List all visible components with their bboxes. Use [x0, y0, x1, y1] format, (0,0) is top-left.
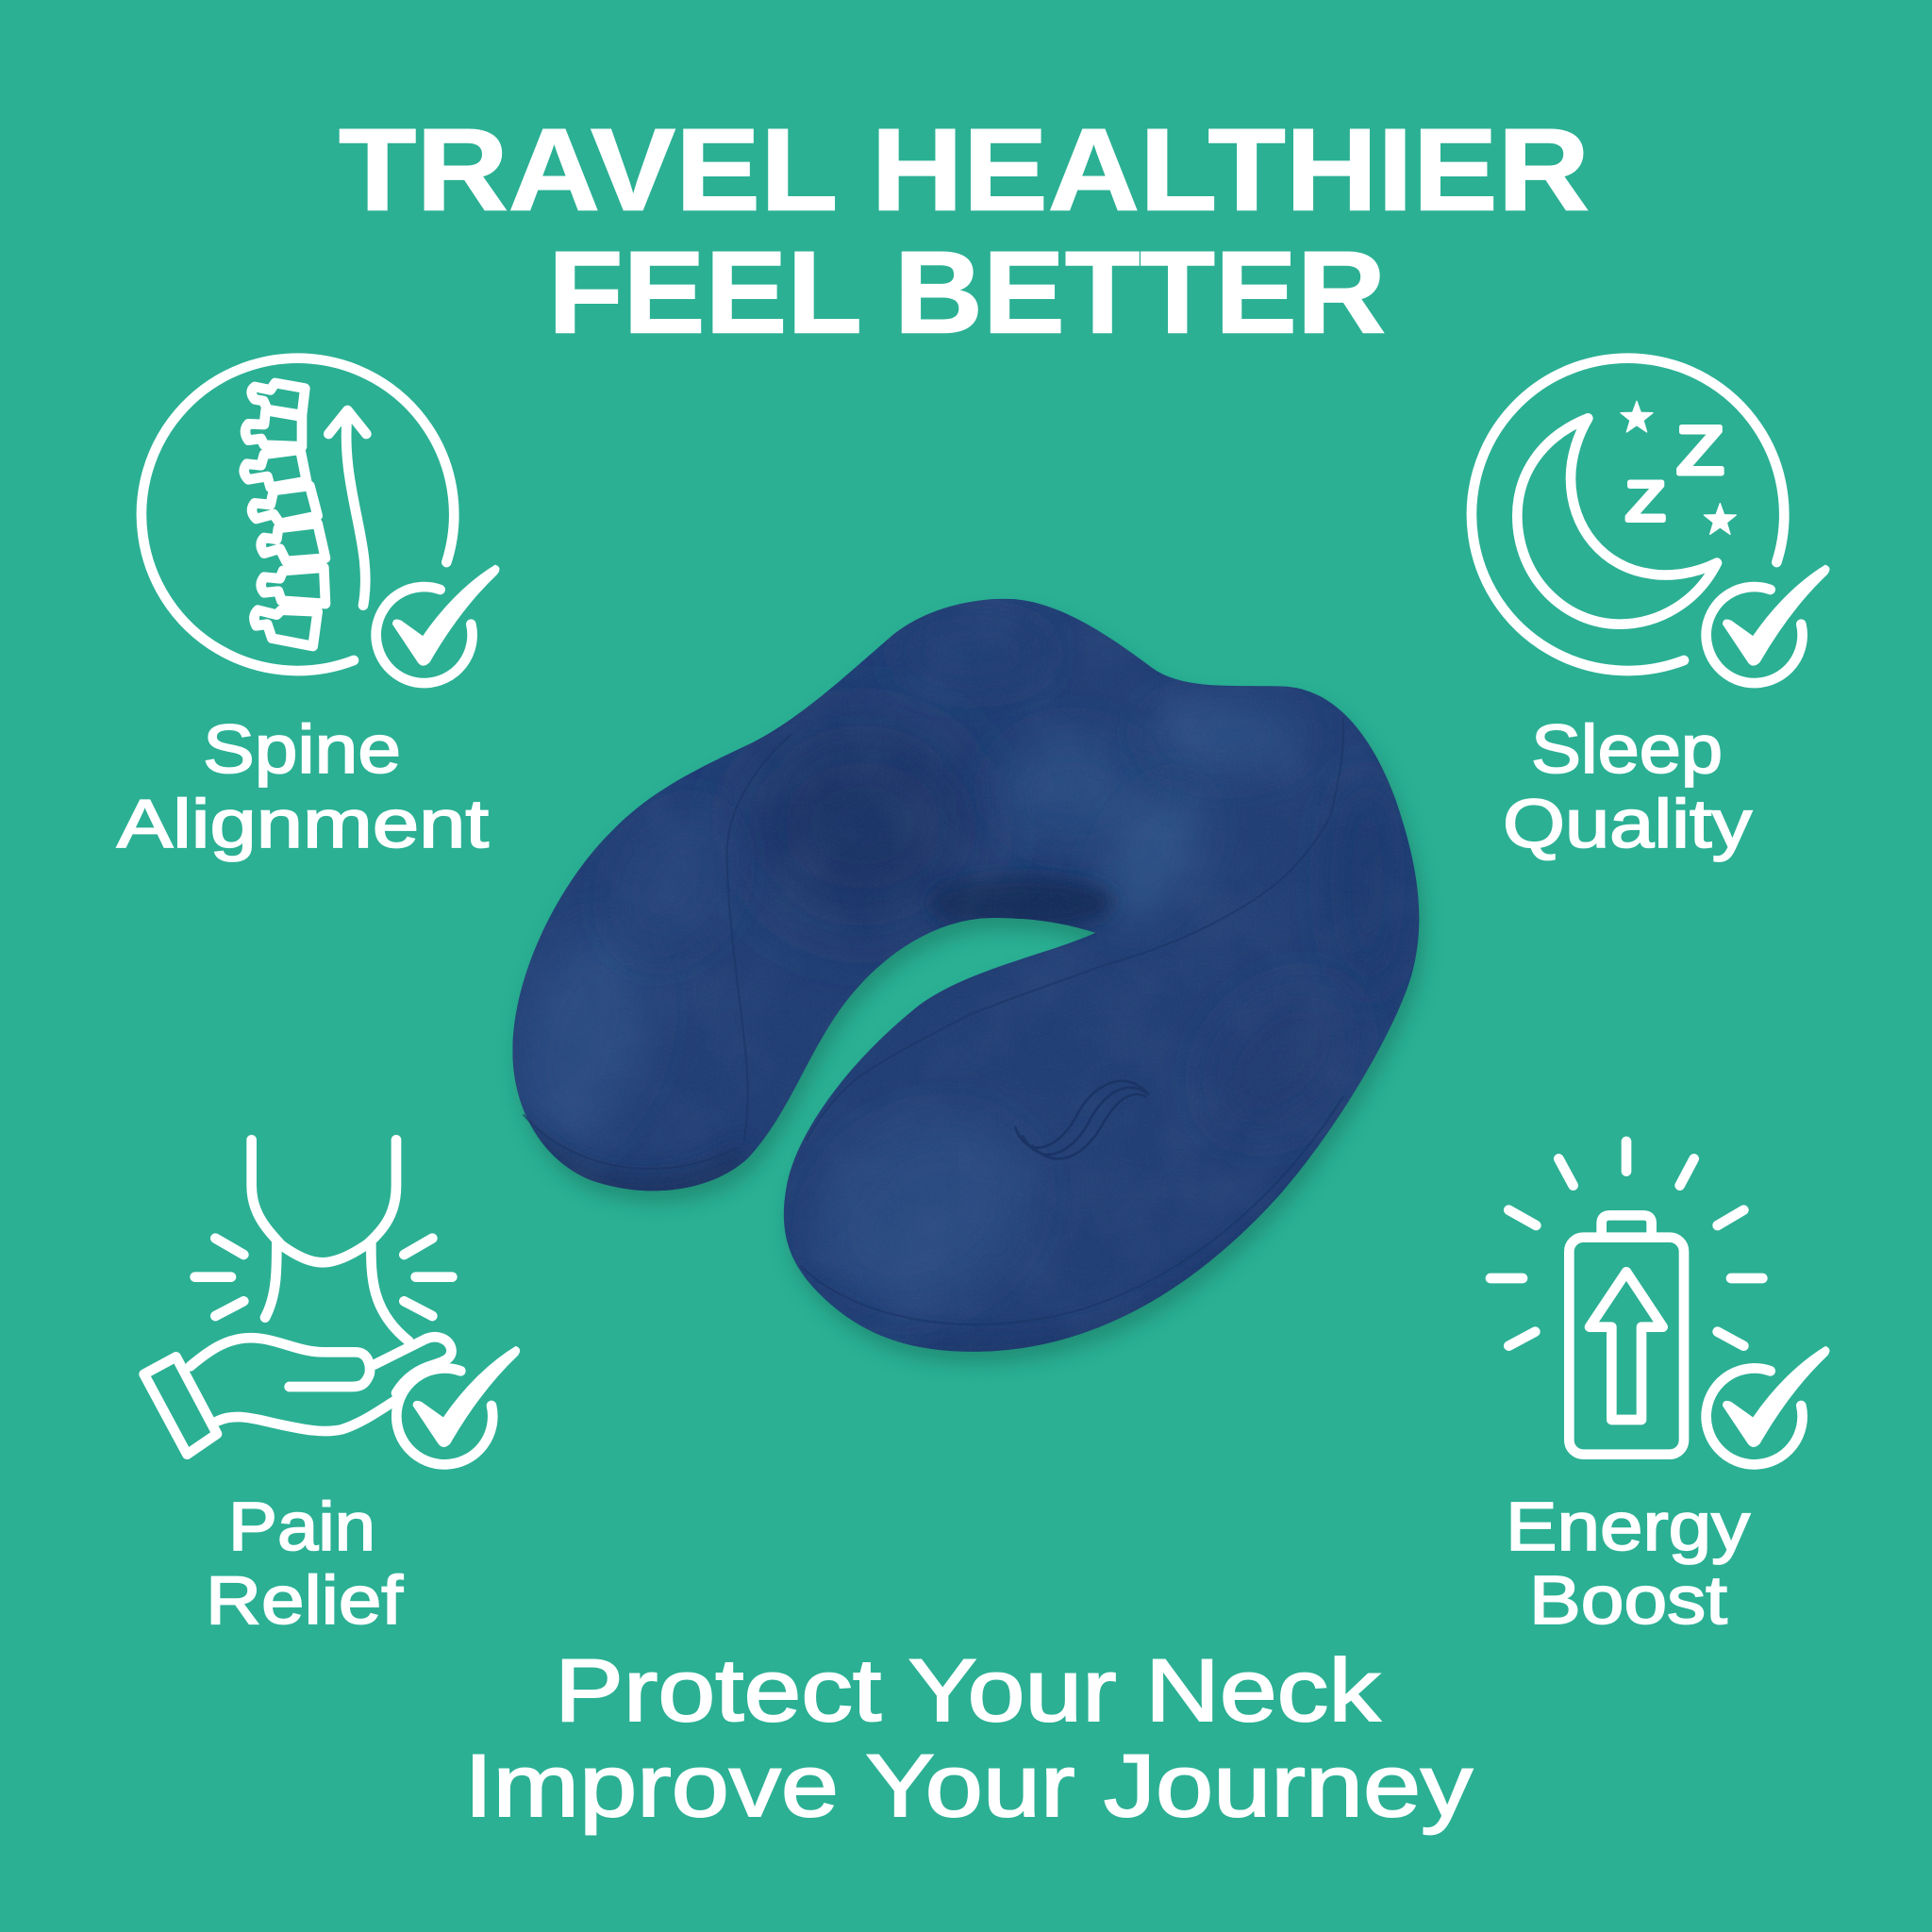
- check badge: [396, 1347, 519, 1464]
- star: [1621, 401, 1653, 432]
- label: energy boost: Energy: [1506, 1490, 1750, 1565]
- star: [1704, 504, 1736, 534]
- upward arrow: [328, 410, 366, 606]
- title: FEEL BETTER: [548, 228, 1386, 358]
- icon: sleep quality: [1472, 358, 1829, 683]
- energy rays: [1491, 1141, 1762, 1346]
- label: pain relief: [206, 1490, 404, 1639]
- sleeping Z letters: [1625, 413, 1724, 532]
- label: pain relief: Relief: [206, 1563, 404, 1639]
- check badge: [1707, 1347, 1829, 1464]
- label: sleep quality: Sleep: [1531, 712, 1723, 788]
- label: pain relief: Pain: [228, 1490, 375, 1565]
- tagline: [464, 1641, 1473, 1835]
- pain rays: [195, 1239, 452, 1316]
- pillow embossed wave logo: [1015, 1081, 1148, 1158]
- title: [339, 106, 1590, 358]
- label: spine alignment: [117, 712, 489, 862]
- label: sleep quality: [1503, 712, 1752, 862]
- label: sleep quality: Quality: [1503, 787, 1752, 862]
- outer circle: [1472, 358, 1784, 671]
- neck pillow product: [492, 579, 1441, 1380]
- outer circle: [142, 358, 454, 671]
- icon: spine alignment: [142, 358, 499, 683]
- pillow seams: [524, 718, 1343, 1324]
- supporting hand: [144, 1337, 452, 1455]
- crescent moon: [1517, 418, 1717, 625]
- tagline: Protect Your Neck: [555, 1641, 1381, 1740]
- label: energy boost: [1506, 1490, 1750, 1639]
- sleeping Z letters: Z: [1625, 471, 1665, 532]
- tagline: Improve Your Journey: [464, 1736, 1473, 1835]
- check badge: [1707, 565, 1829, 683]
- icon: energy boost: [1491, 1141, 1829, 1464]
- label: spine alignment: Spine: [203, 712, 401, 788]
- sleeping Z letters: Z: [1676, 413, 1724, 489]
- battery: [1602, 1215, 1652, 1234]
- spine vertebrae: [244, 383, 325, 646]
- label: energy boost: Boost: [1529, 1563, 1727, 1639]
- icon: pain relief: [144, 1140, 519, 1464]
- up arrow: [1590, 1272, 1663, 1420]
- check badge: [376, 565, 499, 683]
- neck and chin: [252, 1140, 408, 1341]
- title: TRAVEL HEALTHIER: [339, 106, 1590, 236]
- label: spine alignment: Alignment: [117, 787, 489, 862]
